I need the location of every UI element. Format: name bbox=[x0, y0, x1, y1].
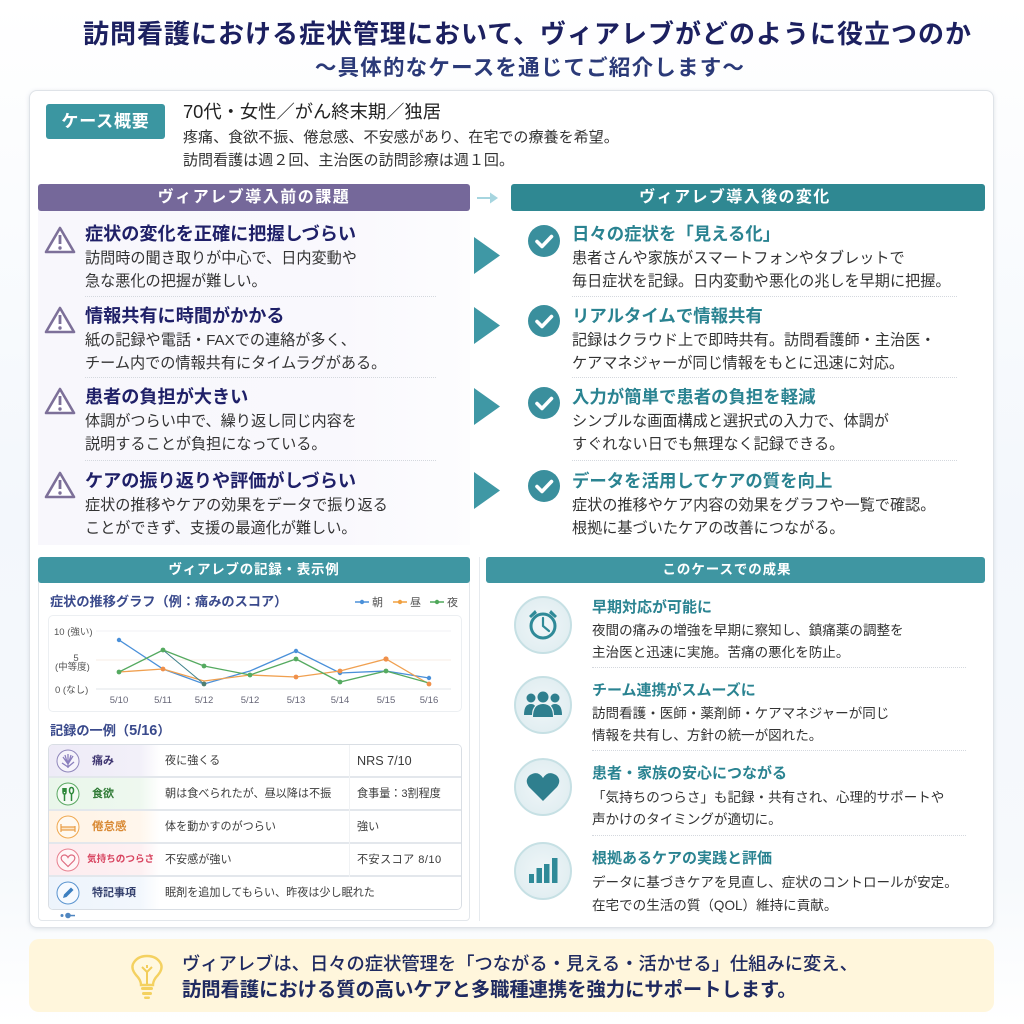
issue text bbox=[85, 332, 386, 372]
distress value: 不安感が強い bbox=[165, 854, 232, 866]
before heading bbox=[38, 184, 470, 211]
pain label: 痛み bbox=[92, 755, 114, 767]
arrow: item 4 bbox=[474, 472, 500, 509]
arrow: item 1 bbox=[474, 237, 500, 274]
divider between panels bbox=[479, 557, 480, 921]
issue heading: 情報共有に時間がかかる bbox=[85, 306, 285, 326]
line chart: 5/14 bbox=[331, 695, 349, 706]
change heading: 日々の症状を「見える化」 bbox=[572, 224, 780, 244]
icon: clock bbox=[514, 596, 572, 654]
outcome heading: チーム連携がスムーズに bbox=[592, 682, 756, 699]
callout: conclusion bbox=[29, 939, 994, 1012]
change text bbox=[572, 496, 935, 537]
change text: すぐれない日でも無理なく記録できる。 bbox=[572, 436, 844, 453]
panel: outcomes of this case bbox=[486, 557, 985, 921]
icon: check bbox=[528, 387, 560, 419]
record example heading: 記録の一例（5/16） bbox=[50, 723, 171, 739]
panel: case overview bbox=[46, 101, 619, 169]
chart legend: 夜 bbox=[447, 596, 458, 609]
issue text: 体調がつらい中で、繰り返し同じ内容を bbox=[85, 413, 357, 430]
pain value: 夜に強くる bbox=[165, 755, 220, 767]
row: emotional distress bbox=[49, 844, 461, 877]
fatigue level: 強い bbox=[357, 821, 379, 833]
change text: 毎日症状を記録。日内変動や悪化の兆しを早期に把握。 bbox=[572, 273, 951, 290]
row: appetite bbox=[49, 778, 461, 811]
case overview badge: ケース概要 bbox=[61, 112, 150, 131]
case description: 疼痛、食欲不振、倦怠感、不安感があり、在宅での療養を希望。 bbox=[183, 129, 619, 146]
outcome text bbox=[592, 871, 958, 917]
issue text bbox=[85, 250, 357, 290]
change text bbox=[572, 332, 935, 372]
outcomes heading bbox=[486, 557, 985, 583]
pain score: NRS 7/10 bbox=[357, 754, 412, 768]
change text: シンプルな画面構成と選択式の入力で、体調が bbox=[572, 413, 889, 430]
issue text: ことができず、支援の最適化が難しい。 bbox=[85, 520, 356, 537]
row: pain bbox=[49, 745, 461, 778]
line chart: 5/12 bbox=[241, 695, 259, 706]
icon: pain bbox=[56, 750, 80, 772]
change 4 bbox=[528, 470, 935, 537]
issue text: チーム内での情報共有にタイムラグがある。 bbox=[85, 355, 386, 372]
issue text bbox=[85, 412, 357, 453]
outcome text: 声かけのタイミングが適切に。 bbox=[592, 812, 782, 826]
main panel background bbox=[29, 90, 994, 928]
line chart: 5/16 bbox=[420, 695, 438, 706]
icon: bar chart bbox=[514, 842, 572, 900]
issue heading: 症状の変化を正確に把握しづらい bbox=[85, 224, 356, 244]
arrow: header bbox=[477, 192, 498, 204]
outcome 4 bbox=[486, 848, 966, 916]
issue 1 bbox=[44, 224, 357, 290]
issue heading: ケアの振り返りや評価がしづらい bbox=[85, 471, 356, 491]
outcome text bbox=[592, 620, 904, 663]
arrow: item 3 bbox=[474, 388, 500, 425]
panel: record and display example bbox=[38, 557, 470, 921]
notes label: 特記事項 bbox=[92, 887, 136, 899]
outcome 1 bbox=[486, 597, 966, 663]
line chart: 10 (強い) bbox=[54, 626, 93, 638]
icon: warning bbox=[44, 472, 76, 498]
outcome text bbox=[592, 703, 889, 746]
outcome heading: 患者・家族の安心につながる bbox=[592, 765, 787, 782]
icon: warning bbox=[44, 306, 76, 334]
change text: 患者さんや家族がスマートフォンやタブレットで bbox=[572, 250, 905, 267]
after heading: ヴィアレブ導入後の変化 bbox=[639, 189, 831, 206]
issue text: 訪問時の聞き取りが中心で、日内変動や bbox=[85, 250, 357, 267]
line chart: 5/10 bbox=[110, 695, 128, 706]
record panel heading bbox=[38, 557, 470, 583]
panel: after introduction bbox=[511, 184, 985, 537]
icon: check bbox=[528, 225, 560, 257]
outcome text: 夜間の痛みの増強を早期に察知し、鎮痛薬の調整を bbox=[592, 623, 904, 638]
issue text: 急な悪化の把握が難しい。 bbox=[85, 273, 267, 290]
fatigue value: 体を動かすのがつらい bbox=[165, 821, 276, 833]
issue heading: 患者の負担が大きい bbox=[85, 387, 248, 407]
case description: 訪問看護は週２回、主治医の訪問診療は週１回。 bbox=[183, 152, 514, 169]
outcome text bbox=[592, 787, 944, 830]
icon: warning bbox=[44, 226, 76, 254]
chart legend: 朝 bbox=[372, 596, 383, 609]
icon: small blue mark bbox=[60, 912, 75, 918]
outcome 3 bbox=[486, 763, 966, 831]
line chart: 5/11 bbox=[154, 695, 172, 706]
outcome text: 情報を共有し、方針の統一が図れた。 bbox=[592, 728, 822, 742]
change 3 bbox=[528, 387, 889, 453]
icon: pen bbox=[56, 882, 80, 904]
change heading: 入力が簡単で患者の負担を軽減 bbox=[572, 387, 815, 407]
record panel heading: ヴィアレブの記録・表示例 bbox=[168, 562, 340, 577]
row: notes bbox=[49, 877, 461, 910]
change heading: リアルタイムで情報共有 bbox=[572, 306, 763, 326]
icon: people bbox=[514, 676, 572, 734]
icon: cutlery bbox=[56, 782, 80, 806]
outcome text: 「気持ちのつらさ」も記録・共有され、心理的サポートや bbox=[592, 790, 944, 805]
panel: before introduction bbox=[38, 184, 470, 545]
chart legend bbox=[355, 596, 458, 609]
issue text: 説明することが負担になっている。 bbox=[85, 436, 326, 453]
line chart: 5/15 bbox=[377, 695, 395, 706]
change text: 記録はクラウド上で即時共有。訪問看護師・主治医・ bbox=[572, 332, 935, 349]
after heading bbox=[511, 184, 985, 211]
change text bbox=[572, 250, 951, 290]
change text: ケアマネジャーが同じ情報をもとに迅速に対応。 bbox=[572, 355, 904, 372]
change text bbox=[572, 412, 889, 453]
outcome heading: 早期対応が可能に bbox=[592, 599, 712, 616]
line chart: 5 bbox=[73, 653, 79, 664]
appetite amount: 食事量：3割程度 bbox=[357, 788, 441, 800]
change 1 bbox=[528, 224, 951, 290]
row: fatigue bbox=[49, 811, 461, 844]
conclusion text: 訪問看護における質の高いケアと多職種連携を強力にサポートします。 bbox=[182, 980, 797, 1001]
conclusion text bbox=[182, 951, 858, 1003]
icon: check bbox=[528, 305, 560, 337]
notes value: 眠剤を追加してもらい、昨夜は少し眠れた bbox=[165, 887, 375, 899]
appetite label: 食欲 bbox=[92, 788, 114, 800]
outcome text: 主治医と迅速に実施。苦痛の悪化を防止。 bbox=[592, 644, 849, 660]
case description bbox=[183, 129, 619, 169]
outcome text: 在宅での生活の質（QOL）維持に貢献。 bbox=[592, 898, 837, 913]
chart heading: 症状の推移グラフ（例：痛みのスコア） bbox=[50, 594, 287, 609]
outcome text: 訪問看護・医師・薬剤師・ケアマネジャーが同じ bbox=[592, 706, 889, 721]
change text: 根拠に基づいたケアの改善につながる。 bbox=[572, 520, 845, 537]
icon: light bulb bbox=[130, 954, 164, 1000]
outcome 2 bbox=[486, 680, 966, 746]
icon: heart outline bbox=[56, 848, 80, 872]
arrow: item 2 bbox=[474, 307, 500, 344]
line chart: (中等度) bbox=[55, 661, 90, 673]
issue 3 bbox=[44, 387, 357, 453]
issue 4 bbox=[44, 471, 388, 537]
fatigue label: 倦怠感 bbox=[92, 821, 126, 833]
title: 訪問看護における症状管理において、ヴィアレブがどのように役立つのか bbox=[83, 19, 972, 49]
outcomes heading: このケースでの成果 bbox=[663, 562, 791, 577]
conclusion text: ヴィアレブは、日々の症状管理を「つながる・見える・活かせる」仕組みに変え、 bbox=[182, 953, 858, 974]
distress score: 不安スコア 8/10 bbox=[357, 854, 442, 866]
issue 2 bbox=[44, 306, 386, 372]
line chart: 5/12 bbox=[195, 695, 213, 706]
line chart: 0 (なし) bbox=[55, 685, 88, 696]
change text: 症状の推移やケア内容の効果をグラフや一覧で確認。 bbox=[572, 497, 935, 514]
outcome text: データに基づきケアを見直し、症状のコントロールが安定。 bbox=[592, 875, 958, 890]
line chart bbox=[48, 615, 462, 712]
appetite value: 朝は食べられたが、昼以降は不振 bbox=[165, 788, 331, 800]
change heading: データを活用してケアの質を向上 bbox=[572, 471, 832, 491]
issue text: 症状の推移やケアの効果をデータで振り返る bbox=[85, 497, 388, 514]
issue text: 紙の記録や電話・FAXでの連絡が多く、 bbox=[85, 332, 356, 349]
outcome heading: 根拠あるケアの実践と評価 bbox=[592, 850, 772, 867]
before heading: ヴィアレブ導入前の課題 bbox=[158, 189, 350, 206]
line chart: 5/13 bbox=[287, 695, 305, 706]
chart legend: 昼 bbox=[410, 596, 421, 609]
issue text bbox=[85, 496, 388, 537]
icon: bed bbox=[56, 816, 80, 838]
record table bbox=[48, 744, 462, 910]
icon: check bbox=[528, 470, 560, 502]
subtitle: 〜具体的なケースを通じてご紹介します〜 bbox=[315, 56, 745, 80]
case overview badge bbox=[46, 104, 165, 139]
change 2 bbox=[528, 305, 935, 372]
distress label: 気持ちのつらさ bbox=[87, 854, 154, 865]
icon: warning bbox=[44, 388, 76, 414]
case patient profile: 70代・女性／がん終末期／独居 bbox=[183, 101, 441, 122]
icon: heart bbox=[514, 758, 572, 816]
